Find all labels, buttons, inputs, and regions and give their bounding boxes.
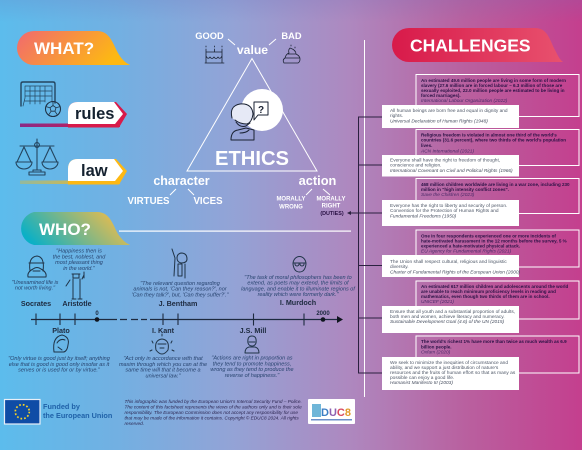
philosopher: J. Bentham — [132, 249, 230, 308]
divider line — [119, 230, 351, 232]
icon: football goal — [21, 82, 60, 116]
challenge 4 — [416, 230, 579, 267]
disclaimer: responsibility. The European Commission does not accept any responsibility for use — [124, 410, 298, 415]
icon: thinking person — [231, 102, 268, 140]
timeline: 2000 — [316, 311, 330, 317]
label: rules — [20, 102, 127, 128]
challenge 5: UNICEF (2021) — [421, 299, 454, 305]
EDUC8 logo — [308, 399, 355, 424]
right 5: Ensure that all youth and a substantial proportion of adults, — [390, 309, 515, 315]
label: rules: rules — [75, 105, 114, 123]
philosopher: I. Murdoch: "The task of moral philosophers has been to — [244, 275, 352, 281]
philosopher: J.S. Mill: they tend to promote happiness, — [213, 361, 291, 367]
challenge 5: An estimated 617 million children and adolescents around the world — [421, 284, 569, 289]
challenge 4: hate-motivated harassment in the 12 months before the survey, 5 % — [421, 238, 567, 244]
icon: cake — [205, 46, 224, 63]
heading: CHALLENGES: CHALLENGES — [410, 36, 531, 56]
philosopher: I. Kant — [119, 326, 207, 379]
challenge 3: million in "high intensity conflict zones". — [421, 187, 509, 192]
bad: BAD — [281, 31, 302, 41]
philosopher: I. Kant: maxim through which you can at the — [119, 362, 207, 368]
ethics triangle diagram — [128, 31, 346, 217]
right 2: conscience and religion. — [390, 162, 441, 168]
philosopher: I. Murdoch: extend, as poets may extend, the limits of — [247, 281, 349, 287]
right 6: resources and the fruits of human effort so that as many as — [390, 370, 516, 376]
philosopher: Aristotle: the best, noblest, and — [53, 254, 106, 260]
morally wrong: WRONG — [279, 205, 303, 211]
challenge 5: mathematics, even though two thirds of them are in school. — [421, 294, 550, 299]
philosopher: Socrates: Socrates — [21, 299, 51, 308]
right 1 — [382, 105, 519, 128]
challenge 5: are unable to reach minimum proficiency levels in reading and — [421, 289, 556, 294]
philosopher: Socrates — [12, 256, 59, 308]
challenge 4: EU Agency for Fundamental Rights (2021) — [421, 248, 512, 254]
disclaimer: reserved. — [124, 421, 144, 426]
heading: WHAT? — [17, 31, 130, 65]
challenge 1: slavery (27.6 million are in forced labour – 6.3 million of those are — [421, 83, 563, 88]
good: GOOD — [195, 31, 224, 41]
white vertical line — [364, 40, 365, 397]
philosopher: I. Kant: universal law." — [146, 373, 182, 379]
challenge 4: experienced a hate-motivated physical attack. — [421, 244, 520, 248]
heading: WHO?: WHO? — [39, 220, 91, 239]
philosopher: J.S. Mill: reverse of happiness." — [225, 373, 280, 379]
philosopher: Plato — [8, 326, 111, 374]
heading: CHALLENGES — [392, 28, 563, 62]
right 2: Everyone shall have the right to freedom of thought, — [390, 158, 500, 164]
label: law: law — [81, 162, 108, 180]
challenge 2: ACN International (2021) — [420, 148, 474, 154]
philosopher: Plato: "Only virtue is good just by itself; anything — [8, 356, 110, 362]
philosopher: I. Kant: "Act only in accordance with that — [123, 356, 203, 362]
challenge 3: 468 million children worldwide are living in a war zone, including 230 — [421, 182, 570, 187]
timeline: 0 — [95, 311, 99, 317]
philosopher: Aristotle: "Happiness then is — [56, 248, 102, 254]
right 6: ability, and we support a just distribution of nature's — [390, 365, 499, 371]
timeline — [31, 311, 343, 326]
challenge 6: Oxfam (2020) — [421, 350, 451, 356]
right 5: Sustainable Development Goal (4.6) of the UN (2015) — [390, 319, 505, 325]
right 6: We seek to minimize the inequities of circumstance and — [390, 360, 508, 366]
right 1: rights. — [390, 113, 403, 119]
philosopher: Aristotle: most pleasant thing — [55, 260, 104, 266]
philosopher: J.S. Mill — [210, 326, 294, 379]
right 1: Universal Declaration of Human Rights (1948) — [390, 118, 488, 124]
challenge 2: Religious freedom is violated in almost one third of the world's — [421, 132, 557, 138]
right 6: possible can enjoy a good life. — [390, 375, 454, 381]
challenge 6 — [416, 336, 579, 373]
philosopher: I. Kant: same time will that it become a — [125, 368, 201, 374]
philosopher: Socrates: not worth living." — [15, 286, 56, 292]
disclaimer: The content of this factsheet represents the views of the authors only and is their sole — [124, 404, 302, 410]
challenge 4: One in four respondents experienced one or more incidents of — [421, 234, 556, 238]
disclaimer: that may be made of the information it contains. Copyright © EDUC8 2024. All rights — [124, 414, 299, 420]
challenge 1 — [416, 74, 579, 116]
philosopher: Aristotle — [53, 248, 106, 308]
value: value — [237, 43, 268, 57]
funding text: Funded by — [43, 402, 80, 411]
challenge 1: International Labour Organization (2022) — [421, 98, 508, 104]
right 3: Fundamental Freedoms (1950) — [390, 214, 457, 220]
philosopher: I. Murdoch: language, and enable it to illuminate regions of — [241, 286, 355, 292]
right 6: Humanist Manifesto III (2003) — [390, 380, 453, 386]
right 3: Everyone has the right to liberty and security of person. — [390, 203, 507, 209]
duties: (DUTIES) — [320, 211, 344, 217]
philosopher: I. Kant: I. Kant — [152, 326, 175, 335]
right 1: All human beings are born free and equal in dignity and — [390, 108, 508, 114]
philosopher: I. Murdoch — [241, 256, 355, 307]
virtues: VIRTUES — [128, 196, 170, 207]
philosopher: J. Bentham: animals is not, 'Can they reason?', nor — [133, 287, 228, 293]
action: action — [299, 173, 337, 188]
EDUC8 logo: DUC8 — [321, 407, 351, 419]
funding text: the European Union — [43, 411, 112, 420]
philosopher: J. Bentham: J. Bentham — [159, 299, 197, 308]
challenge 1: forced marriages). — [421, 93, 461, 98]
heading: WHO? — [21, 212, 130, 245]
challenge 3 — [416, 178, 579, 214]
philosopher: J. Bentham: 'Can they talk?', but, 'Can they suffer?'." — [132, 292, 230, 298]
icon: scales of justice — [16, 139, 58, 175]
philosopher: Aristotle: in the world." — [63, 266, 96, 272]
challenge 5 — [416, 281, 579, 319]
philosopher: Socrates: "Unexamined life is — [12, 280, 58, 286]
right 3: Convention for the Protection of Human Rights and — [390, 208, 499, 214]
character: character — [153, 174, 210, 188]
philosopher: J.S. Mill: J.S. Mill — [240, 326, 266, 335]
connector bracket — [351, 117, 382, 373]
right 6 — [382, 357, 519, 390]
white circle — [241, 89, 283, 131]
challenge 3: Save the Children (2023) — [421, 192, 475, 198]
challenge 1: An estimated 49.6 million people are living in some form of modern — [421, 78, 566, 83]
title: ETHICS: ETHICS — [215, 148, 289, 170]
morally right: RIGHT — [322, 204, 341, 210]
right 4: The Union shall respect cultural, religious and linguistic — [390, 259, 507, 265]
philosopher: Plato: Plato — [52, 326, 70, 335]
arrow to duties — [347, 211, 351, 215]
challenge 2 — [416, 130, 579, 166]
label: law — [20, 159, 127, 184]
philosopher: Plato: serves or is used for or by virtue." — [18, 368, 101, 374]
right 2: International Covenant on Civil and Political Rights (1966) — [390, 168, 513, 174]
right 4: diversity. — [390, 264, 409, 270]
right 2 — [382, 155, 519, 176]
connector lines — [170, 39, 330, 195]
challenge 2: lives. — [421, 143, 432, 148]
triangle — [187, 58, 317, 171]
EU flag — [4, 400, 40, 424]
right 4 — [382, 255, 521, 277]
challenge 1: sexually exploited, 22.0 million people are estimated to be living in — [421, 88, 565, 93]
disclaimer: This infographic was funded by the European Union's Internal Security Fund – Police. — [124, 399, 302, 404]
right 5 — [382, 306, 519, 333]
icon: poop cake — [283, 45, 300, 63]
philosopher: I. Murdoch: reality which were formerly dark." — [258, 292, 339, 298]
challenge 6: billion people. — [421, 344, 452, 350]
philosopher: J.S. Mill: wrong as they tend to produce the — [210, 367, 294, 373]
morally wrong: MORALLY — [276, 197, 306, 203]
philosopher: I. Murdoch: I. Murdoch — [280, 298, 316, 307]
philosopher: J.S. Mill: "Actions are right in proportion as — [211, 356, 293, 362]
right 5: both men and women, achieve literacy and numeracy. — [390, 314, 505, 320]
question mark: ? — [258, 105, 264, 116]
philosopher: Plato: else that is good is good only insofar as it — [9, 362, 110, 368]
right 4: Charter of Fundamental Rights of the European Union (2000) — [390, 270, 521, 276]
vices: VICES — [193, 196, 223, 207]
challenge 6: The world's richest 1% have more than twice as much wealth as 6.9 — [421, 339, 567, 344]
heading: WHAT?: WHAT? — [34, 39, 94, 58]
challenge 2: countries (31.6 percent), where two thirds of the world's population — [421, 138, 566, 142]
philosopher: J. Bentham: "The relevant question regarding — [140, 281, 220, 287]
morally right: MORALLY — [316, 197, 346, 203]
philosopher: Aristotle: Aristotle — [62, 299, 92, 308]
right 3 — [382, 200, 519, 226]
